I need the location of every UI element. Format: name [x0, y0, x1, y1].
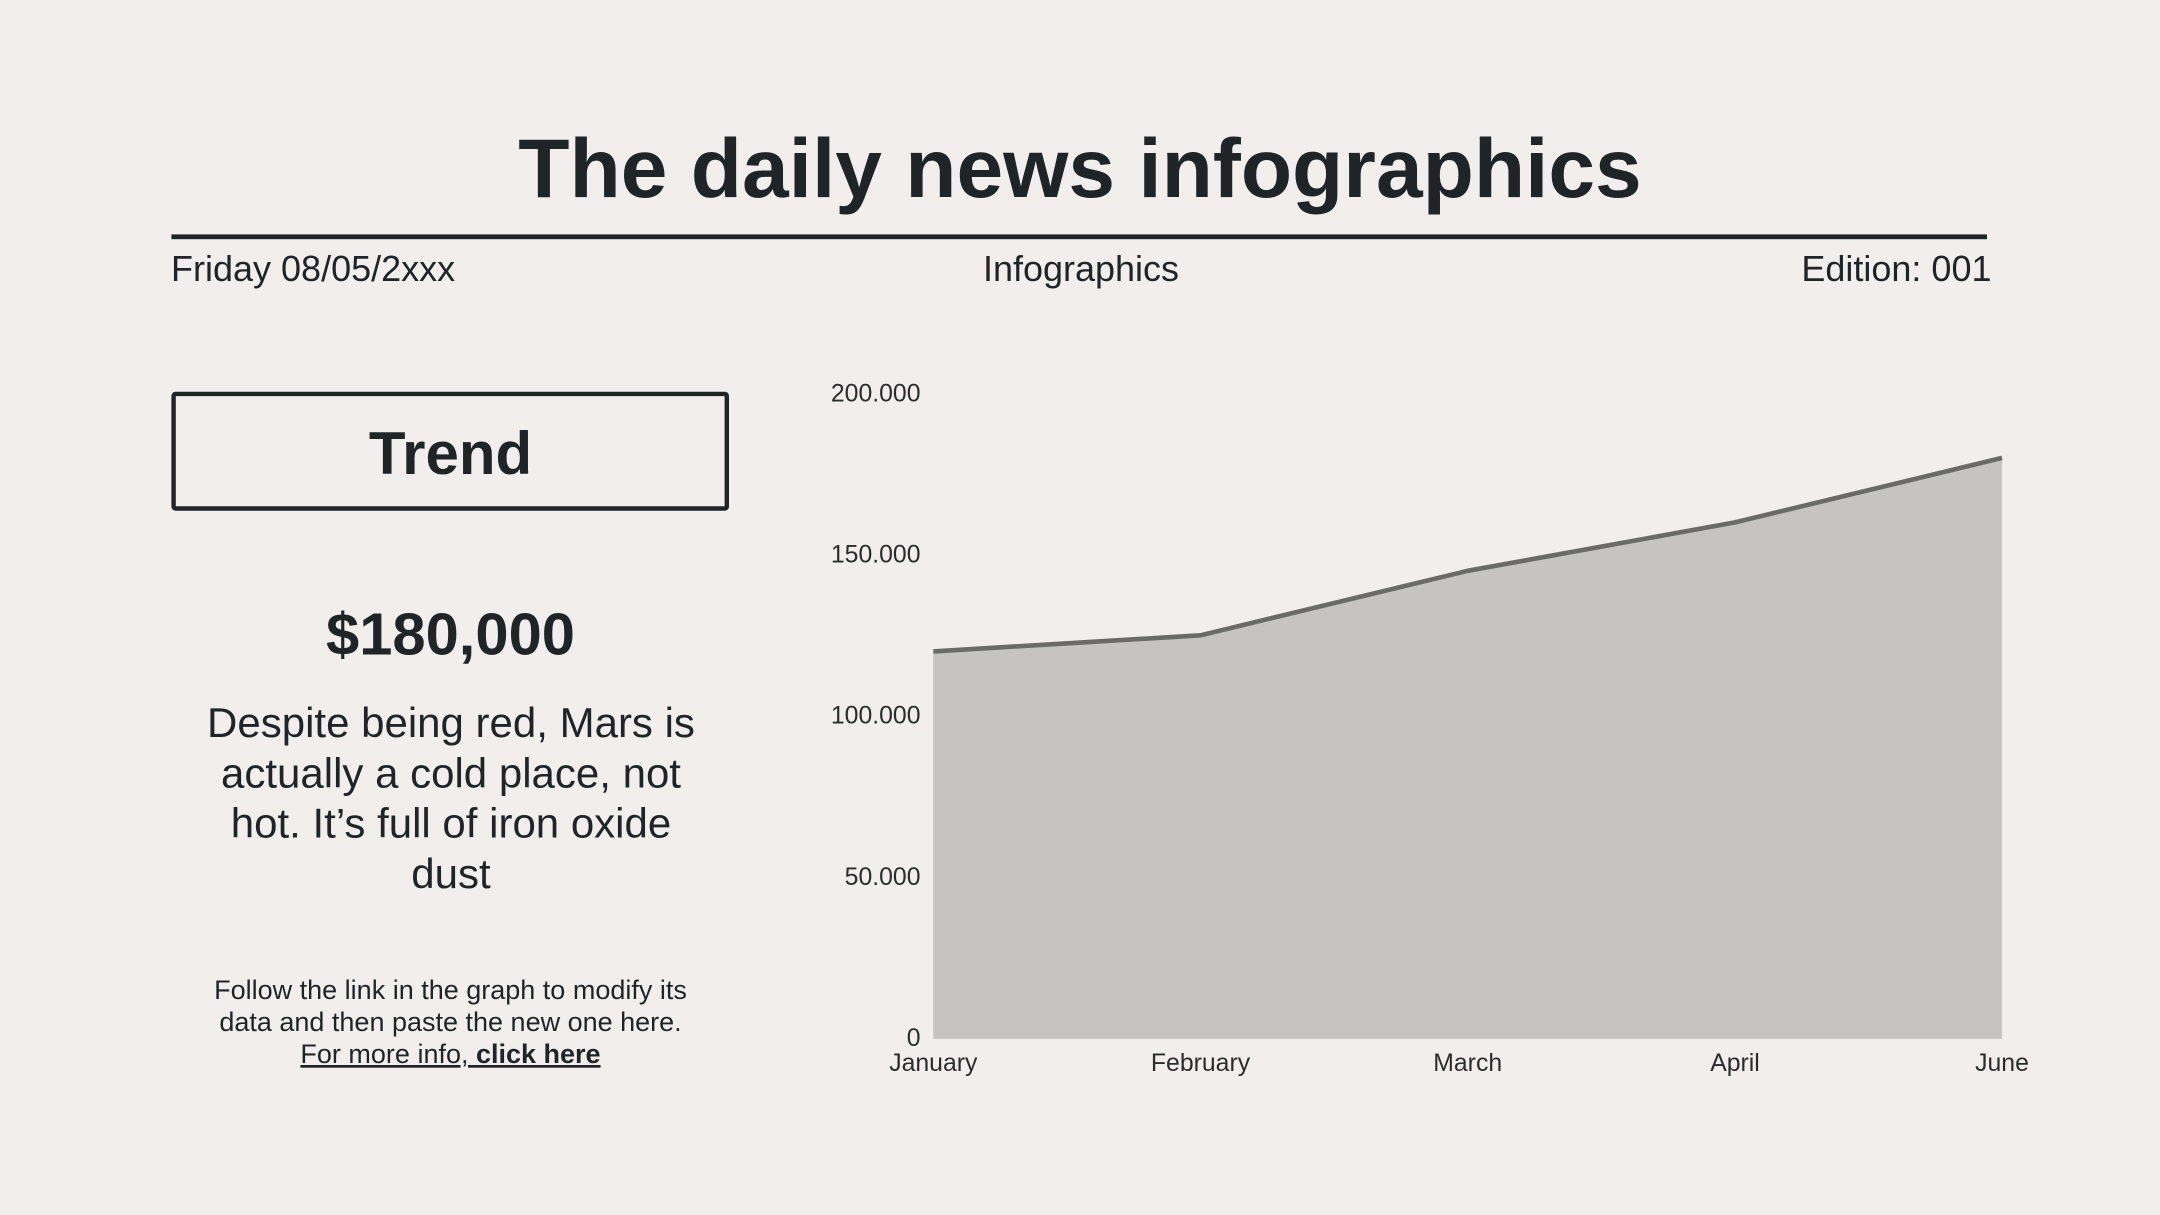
note text	[214, 975, 687, 1069]
masthead: section: Infographics	[983, 248, 1179, 289]
x axis labels	[889, 1050, 2029, 1077]
note text: For more info, click here	[300, 1039, 601, 1069]
masthead: edition: Edition: 001	[1801, 248, 1992, 289]
x axis labels: March	[1433, 1050, 1502, 1077]
chart area fill	[933, 458, 2002, 1039]
y axis labels: 50.000	[845, 864, 920, 891]
description text: actually a cold place, not	[221, 749, 681, 796]
note text: Follow the link in the graph to modify its	[214, 975, 687, 1005]
y axis labels: 100.000	[831, 702, 920, 730]
title: The daily news infographics	[518, 121, 1642, 215]
y axis labels: 200.000	[831, 380, 920, 408]
y axis labels	[831, 380, 920, 1052]
description text: dust	[411, 850, 491, 897]
x axis labels: April	[1710, 1050, 1760, 1077]
chart line	[933, 458, 2002, 651]
note text: data and then paste the new one here.	[219, 1007, 682, 1037]
area chart	[831, 380, 2029, 1077]
description text: hot. It’s full of iron oxide	[231, 800, 671, 847]
x axis labels: February	[1151, 1050, 1251, 1077]
panel: trend heading box	[174, 394, 727, 508]
x axis labels: June	[1975, 1050, 2029, 1077]
description text: Despite being red, Mars is	[207, 699, 695, 746]
key figure: $180,000	[326, 600, 575, 668]
description text	[207, 699, 695, 897]
heading: trend: Trend	[369, 420, 532, 487]
x axis labels: January	[889, 1050, 978, 1077]
masthead: date: Friday 08/05/2xxx	[171, 248, 455, 289]
y axis labels: 0	[907, 1025, 920, 1052]
y axis labels: 150.000	[831, 542, 920, 568]
